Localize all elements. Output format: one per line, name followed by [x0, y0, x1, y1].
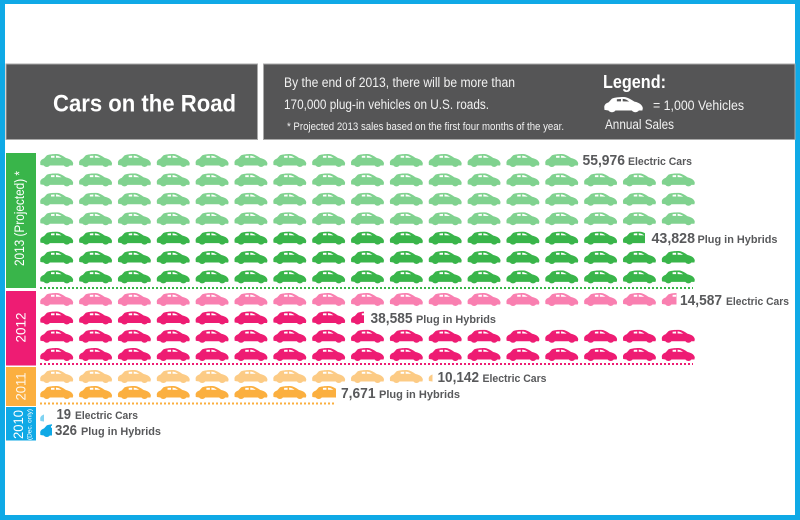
icon: partial electric car: [40, 414, 44, 422]
cars: 2012 electric: [40, 293, 695, 306]
cars: 2013 plug in hybrids: [40, 232, 695, 283]
label: 55,976 electric cars: [582, 153, 692, 169]
legend: [603, 72, 744, 132]
year tab: 2011: [6, 367, 36, 406]
label: 326 plug in hybrids: 326: [55, 423, 77, 439]
year tab: 2013: 2013 (Projected) *: [11, 171, 27, 266]
cars: 2011 plug in hybrids: [40, 386, 695, 399]
year tab: 2010: 2010: [10, 410, 26, 439]
title panel: [6, 64, 258, 140]
label: 19 electric cars: 19: [56, 407, 71, 423]
label: 7,671 plug in hybrids: 7,671: [341, 386, 376, 402]
panel: 2011: [6, 367, 695, 406]
label: 38,585 plug in hybrids: 38,585: [370, 311, 412, 327]
intro text: * Projected 2013 sales based on the first four months of the year.: [287, 121, 564, 133]
label: 38,585 plug in hybrids: Plug in Hybrids: [416, 314, 496, 326]
year tab: 2012: [6, 291, 36, 366]
info and legend panel: [264, 64, 795, 140]
label: 10,142 electric cars: Electric Cars: [482, 373, 546, 385]
label: 55,976 electric cars: 55,976: [582, 153, 625, 169]
year tab: 2011: 2011: [12, 372, 28, 400]
panel: 2010: [6, 407, 695, 440]
year tab: 2010: (Dec. only): [26, 409, 34, 440]
cars: 2012 plug in hybrids: [40, 312, 695, 361]
label: 14,587 electric cars: [680, 293, 789, 309]
label: 19 electric cars: Electric Cars: [75, 410, 138, 422]
label: 326 plug in hybrids: Plug in Hybrids: [81, 426, 161, 438]
label: 43,828 plug in hybrids: 43,828: [652, 231, 695, 247]
intro text: 170,000 plug-in vehicles on U.S. roads.: [284, 97, 489, 112]
label: 55,976 electric cars: Electric Cars: [628, 156, 692, 168]
label: 7,671 plug in hybrids: [341, 386, 460, 402]
legend: Legend:: [603, 72, 666, 92]
label: 7,671 plug in hybrids: Plug in Hybrids: [379, 389, 460, 401]
title: Cars on the Road: [53, 90, 236, 118]
intro text: By the end of 2013, there will be more than: [284, 75, 515, 90]
icon: partial plug in hybrid car: [40, 424, 52, 437]
legend: Annual Sales: [605, 117, 674, 132]
icon: legend car: [604, 97, 643, 112]
panel: 2012: [6, 291, 789, 366]
year tab: 2010: [6, 407, 36, 440]
label: 38,585 plug in hybrids: [370, 311, 496, 327]
legend: = 1,000 Vehicles: [653, 98, 744, 113]
label: 10,142 electric cars: 10,142: [438, 370, 479, 386]
year tab: 2013: [6, 153, 36, 288]
cars: 2011 electric: [40, 370, 695, 383]
label: 10,142 electric cars: [438, 370, 546, 386]
panel: 2013: [6, 153, 778, 288]
year tab: 2012: 2012: [12, 312, 28, 342]
label: 326 plug in hybrids: [55, 423, 161, 439]
label: 43,828 plug in hybrids: Plug in Hybrids: [698, 234, 778, 246]
label: 43,828 plug in hybrids: [652, 231, 778, 247]
intro text: [284, 75, 564, 133]
cars: 2013 electric: [40, 154, 695, 225]
label: 19 electric cars: [56, 407, 138, 423]
label: 14,587 electric cars: 14,587: [680, 293, 722, 309]
label: 14,587 electric cars: Electric Cars: [726, 296, 789, 308]
